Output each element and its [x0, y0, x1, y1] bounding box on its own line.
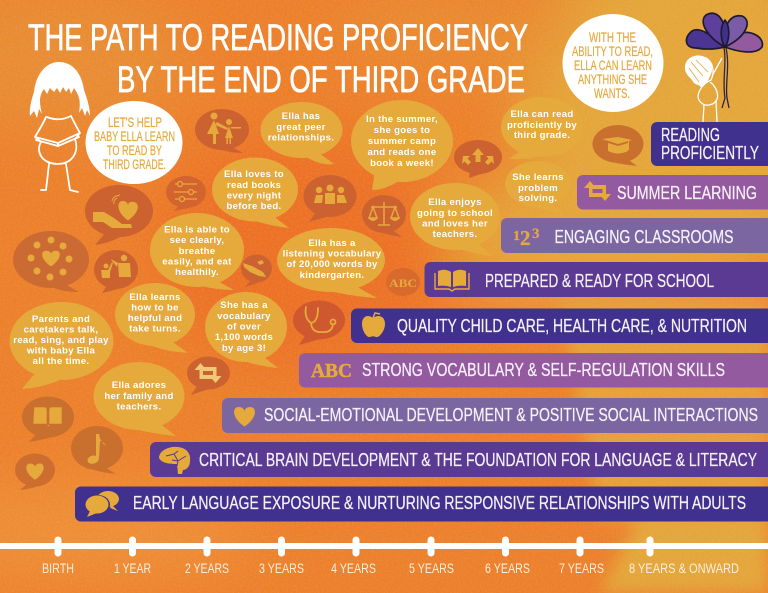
bar: vocabulary and self-regulation: [299, 353, 768, 388]
bubble: helpful: [115, 283, 195, 353]
bubble: adores family: teachers.: [117, 402, 161, 412]
bubble: helpful: Ella learns: [129, 292, 181, 303]
bar: reading proficiently: [651, 122, 768, 166]
icon: hand holding heart: [85, 185, 153, 245]
bubble: problem solving: problem: [518, 183, 558, 194]
title: BY THE END OF THIRD GRADE: [117, 59, 525, 100]
bubble: helpful: helpful and: [128, 313, 182, 324]
timeline: BIRTH: [42, 561, 74, 576]
bubble: healthy: Ella is able to: [164, 224, 230, 236]
bubble: healthy: breathe: [179, 246, 215, 257]
bubble: reads proficiently: proficiently by: [507, 120, 577, 131]
callout: let's help baby Ella: THIRD GRADE.: [103, 157, 166, 172]
bubble: 1,100 words: by age 3!: [222, 343, 266, 354]
bubble: loves books: every night: [227, 190, 282, 202]
bubble: 1,100 words: 1,100 words: [215, 332, 273, 343]
icon: sliders: [166, 176, 206, 211]
bubble: enjoys school: [410, 183, 500, 256]
bubble: loves books: read books: [227, 180, 281, 191]
bar: vocabulary and self-regulation: ABC: [311, 360, 352, 382]
bar: social-emotional: [222, 398, 768, 433]
bubble: healthy: see clearly,: [170, 235, 224, 246]
bubble: listening vocabulary: Ella has a: [308, 238, 356, 249]
bubble: enjoys school: teachers.: [433, 229, 477, 240]
bubble: healthy: [150, 213, 244, 290]
timeline: 5 YEARS: [409, 561, 454, 576]
bubble: enjoys school: Ella enjoys: [428, 197, 482, 208]
bubble: listening vocabulary: of 20,000 words by: [286, 259, 378, 270]
bubble: parents and caretakers: caretakers talk,: [24, 324, 98, 336]
bubble: enjoys school: and loves her: [422, 218, 488, 230]
icon: repeat arrows: [187, 356, 230, 395]
bar: engaging classrooms: 2: [520, 226, 530, 250]
bubble: healthy: easily, and eat: [162, 256, 232, 268]
icon: graduation cap: [592, 125, 644, 166]
bubble: problem solving: She learns: [512, 172, 564, 183]
bubble: problem solving: [505, 161, 571, 213]
callout: with the ability to read: [562, 14, 664, 112]
timeline: 1 YEAR: [114, 561, 151, 576]
illustration: Ella with flower balloon: [685, 13, 762, 122]
bubble: problem solving: solving.: [519, 193, 557, 204]
illustration: baby Ella reading: [30, 62, 90, 192]
bubble: summer camp: [351, 100, 453, 190]
callout: with the ability to read: ELLA CAN LEARN: [574, 58, 652, 73]
bubble: 1,100 words: of over: [227, 322, 261, 332]
bubble: adores family: Ella adores: [112, 380, 166, 391]
bubble: helpful: take turns.: [129, 324, 181, 334]
bubble: enjoys school: going to school: [417, 208, 493, 219]
bubble: parents and caretakers: read, sing, and play: [13, 335, 109, 346]
bubble: adores family: her family and: [104, 391, 174, 402]
bubble: 1,100 words: She has a: [220, 300, 268, 311]
callout: with the ability to read: ABILITY TO READ,: [572, 44, 653, 59]
bubble: peer relationships: Ella has: [282, 111, 320, 122]
bar: engaging classrooms: 3: [532, 226, 540, 242]
bubble: helpful: how to be: [131, 302, 179, 314]
bubble: loves books: [212, 158, 298, 228]
bubble: listening vocabulary: [277, 228, 385, 298]
bubble: summer camp: In the summer,: [366, 114, 438, 125]
callout: let's help baby Ella: TO READ BY: [107, 143, 162, 158]
bar: engaging classrooms: 1: [513, 229, 520, 244]
bubble: reads proficiently: third grade.: [514, 130, 570, 141]
icon: scales: [362, 195, 406, 237]
bar: summer learning: [577, 175, 768, 210]
callout: let's help baby Ella: [86, 101, 182, 184]
bubble: reads proficiently: Ella can read: [510, 109, 574, 120]
title: [28, 17, 528, 100]
bubble: 1,100 words: vocabulary: [217, 311, 271, 322]
timeline: 3 YEARS: [259, 561, 304, 576]
icon: heart bubble: [15, 454, 55, 490]
bubble: peer relationships: [260, 102, 342, 164]
speech bubbles: milestones: [10, 97, 583, 436]
bar: prepared and ready: [424, 262, 768, 297]
icon: group of people: [304, 175, 356, 222]
icon: arrows up and out: [454, 140, 502, 178]
bar: reading proficiently: READING: [661, 124, 720, 145]
icon: ABC bubble: ABC: [389, 276, 417, 290]
callout: with the ability to read: ANYTHING SHE: [578, 72, 647, 87]
icon bubbles: [13, 109, 644, 490]
bubble: parents and caretakers: [10, 302, 114, 389]
bubble: summer camp: summer camp: [368, 136, 436, 147]
timeline: 4 YEARS: [331, 561, 376, 576]
callout: with the ability to read: WANTS.: [594, 86, 630, 101]
bar: early language: [75, 486, 768, 522]
bubble: parents and caretakers: Parents and: [32, 314, 90, 325]
bubble: summer camp: and reads one: [368, 147, 436, 158]
icon: heart with dots: [13, 231, 89, 292]
bubble: parents and caretakers: all the time.: [33, 356, 89, 367]
timeline: 6 YEARS: [485, 561, 530, 576]
staircase of bars: [75, 122, 768, 522]
bubble: peer relationships: relationships.: [268, 132, 334, 144]
timeline: 2 YEARS: [185, 561, 229, 576]
bubble: loves books: Ella loves to: [224, 169, 284, 180]
bubble: 1,100 words: [205, 292, 287, 368]
icon: book bubble: [22, 396, 74, 442]
icon: parent and child: [195, 109, 249, 153]
bar: engaging classrooms: [501, 218, 768, 253]
icon: music note: [71, 426, 123, 474]
bar: brain development: [150, 442, 768, 477]
timeline: [0, 536, 768, 576]
timeline: 8 YEARS & ONWARD: [629, 561, 739, 576]
callout: let's help baby Ella: LET'S HELP: [108, 115, 162, 130]
bubble: loves books: before bed.: [226, 201, 282, 212]
bubble: parents and caretakers: with baby Ella: [26, 346, 95, 356]
callout: with the ability to read: WITH THE: [589, 30, 636, 45]
icon: stethoscope: [293, 300, 345, 345]
bubble: healthy: healthily.: [175, 267, 219, 278]
icon: high five: [94, 250, 138, 293]
bubble: listening vocabulary: kindergarten.: [300, 270, 364, 281]
icon: ABC bubble: [386, 268, 420, 296]
bubble: peer relationships: great peer: [276, 122, 326, 133]
callout: let's help baby Ella: BABY ELLA LEARN: [94, 129, 175, 144]
bubble: reads proficiently: [501, 97, 583, 159]
bubble: adores family: [94, 362, 184, 436]
timeline: 7 YEARS: [559, 561, 604, 576]
bubble: listening vocabulary: listening vocabulary: [283, 248, 382, 260]
bar: quality care: [351, 308, 768, 343]
bubble: summer camp: book a week!: [370, 158, 434, 169]
title: THE PATH TO READING PROFICIENCY: [28, 17, 528, 58]
icon: helping hands: [241, 254, 272, 287]
bubble: summer camp: she goes to: [374, 125, 430, 136]
